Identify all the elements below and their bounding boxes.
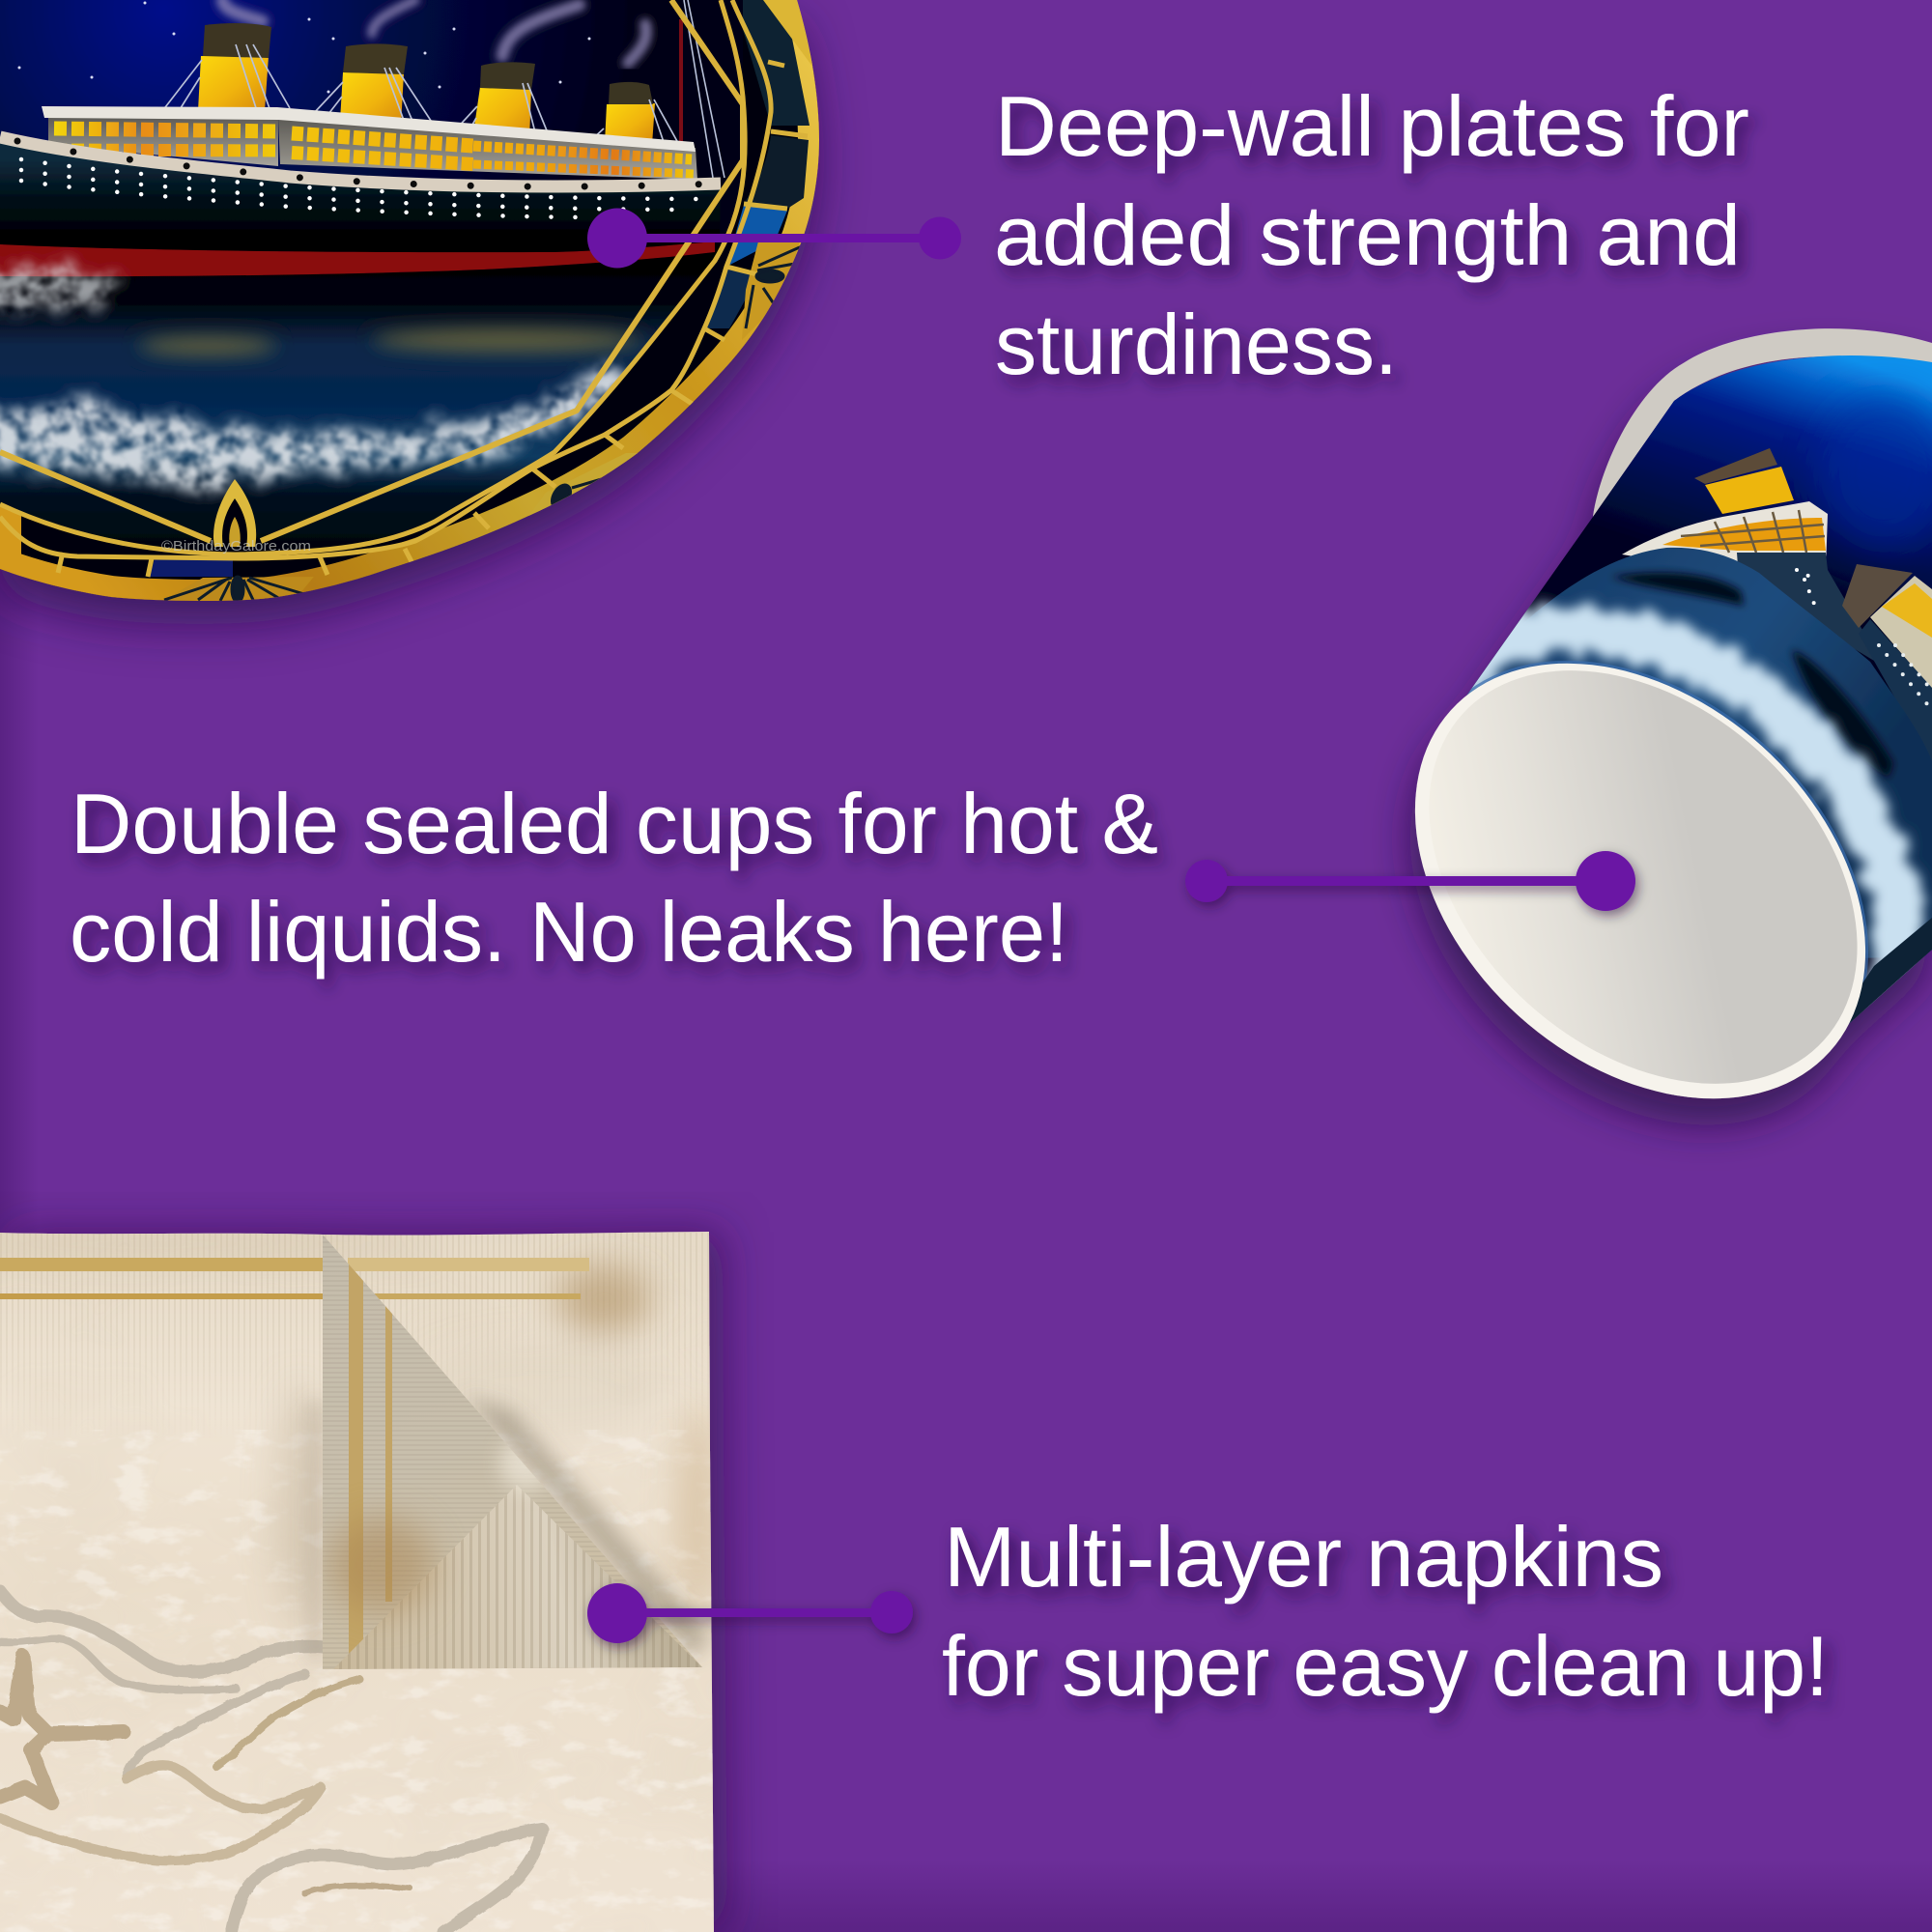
sea on cup bbox=[1449, 548, 1932, 966]
napkin stains and pleats bbox=[0, 1233, 715, 1633]
foam band bbox=[1301, 530, 1932, 1214]
text: plates: Deep-wall plates for bbox=[995, 78, 1749, 174]
gold border stripes bbox=[0, 1258, 589, 1299]
funnel 1 bbox=[162, 23, 290, 111]
plate: Titanic design bbox=[0, 0, 819, 602]
cup wall artwork bbox=[1301, 328, 1932, 1214]
golden reflections on water bbox=[138, 328, 642, 355]
text: napkins: Multi-layer napkins bbox=[944, 1509, 1663, 1605]
text: plates bbox=[994, 78, 1749, 392]
plate base and gold rim bbox=[0, 0, 819, 601]
superstructure bbox=[42, 106, 697, 180]
fan ornaments bbox=[164, 246, 802, 602]
funnel 4 bbox=[597, 81, 678, 141]
text: cups: cold liquids. No leaks here! bbox=[70, 884, 1068, 980]
folded corner flap bbox=[323, 1235, 709, 1669]
hull bbox=[0, 137, 721, 276]
text: napkins: for super easy clean up! bbox=[942, 1618, 1829, 1714]
flame ornament bbox=[213, 479, 256, 547]
dragon line art bbox=[0, 1591, 542, 1932]
mast bbox=[679, 19, 683, 142]
text: plates: sturdiness. bbox=[995, 297, 1398, 392]
cup base bbox=[1329, 576, 1932, 1186]
connector: cup callout bbox=[1185, 851, 1635, 911]
connector: plate callout bbox=[587, 209, 961, 269]
text: napkins bbox=[942, 1509, 1829, 1714]
wave shadows bbox=[1611, 573, 1893, 778]
text: plates: added strength and bbox=[994, 187, 1741, 283]
ocean foam bbox=[0, 266, 638, 484]
napkin bbox=[0, 1227, 720, 1932]
cup: upside down with Titanic wrap bbox=[1301, 328, 1932, 1214]
watermark: ©BirthdayGalore.com bbox=[161, 538, 311, 554]
ship on cup bbox=[1622, 448, 1932, 763]
connector: napkin callout bbox=[587, 1583, 913, 1643]
decorative band panels bbox=[150, 0, 813, 600]
gold frame lines bbox=[0, 0, 808, 577]
text: cups: Double sealed cups for hot & bbox=[71, 776, 1158, 871]
text: cups bbox=[70, 776, 1158, 980]
cup rim bbox=[1593, 328, 1932, 517]
flap shadow on napkin bbox=[309, 1396, 710, 1662]
napkin mottling bbox=[0, 1227, 720, 1932]
stars bbox=[19, 3, 589, 92]
funnel 3 bbox=[461, 62, 548, 129]
night sky and ocean scene bbox=[0, 0, 773, 555]
smoke wisps bbox=[222, 0, 646, 63]
funnel 2 bbox=[315, 43, 432, 120]
